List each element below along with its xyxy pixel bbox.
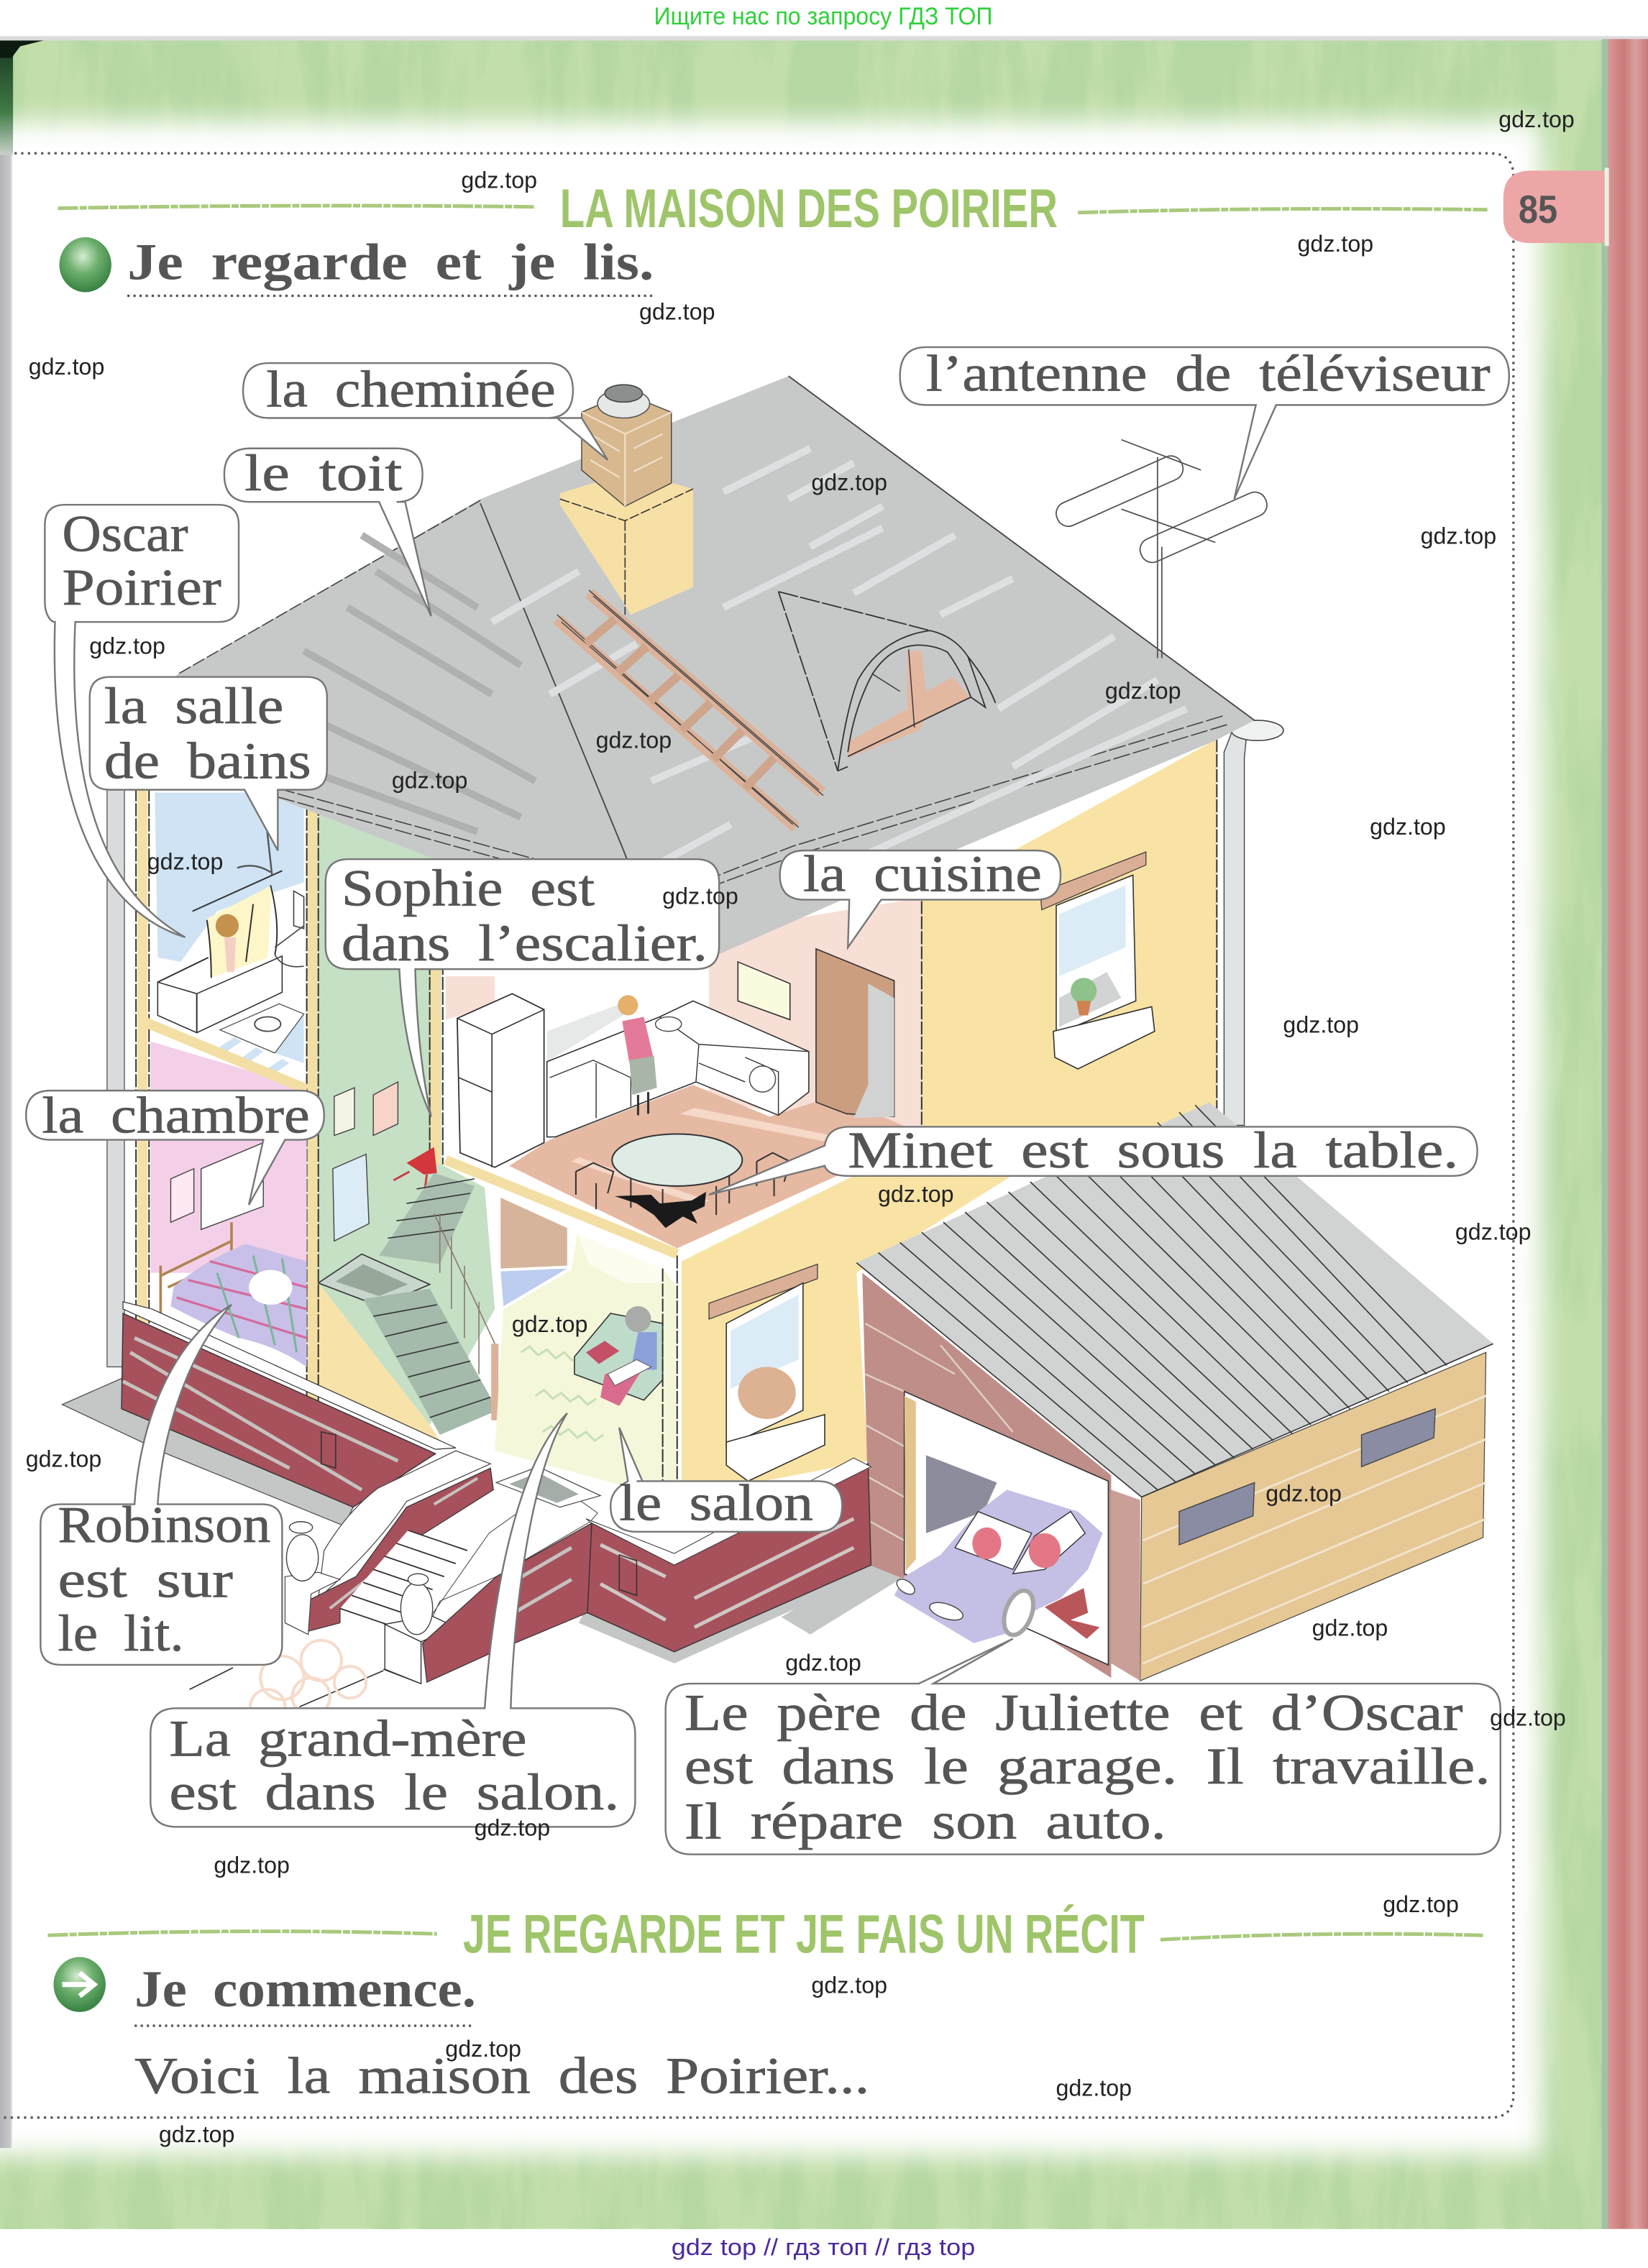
garage windows: [1179, 1482, 1255, 1545]
watermarks: gdz.top: [512, 1311, 587, 1337]
watermarks: gdz.top: [214, 1852, 290, 1878]
watermarks: gdz.top: [445, 2036, 521, 2062]
bubble: la grand-mère est dans le salon: est dans le salon.: [169, 1763, 619, 1821]
heading: la maison des Poirier: [58, 178, 1488, 239]
platforms: [285, 1572, 340, 1635]
page number tab: [1503, 167, 1609, 246]
bubble: Sophie est dans l'escalier: dans l’escalier.: [342, 914, 708, 972]
watermarks: gdz.top: [26, 1446, 101, 1472]
shower curtain: [193, 810, 282, 978]
watermarks: gdz.top: [1498, 106, 1575, 132]
bubble: Oscar Poirier: [45, 505, 239, 937]
bubble: la cuisine: [780, 844, 1061, 947]
heading: la maison des Poirier: LA MAISON DES POIRIER: [560, 178, 1058, 239]
garage: [856, 1102, 1493, 1681]
bubble: la chambre: [26, 1085, 324, 1205]
bubble: Robinson est sur le lit: [40, 1305, 282, 1665]
heading: je regarde et je fais un récit: [47, 1904, 1483, 1965]
bubble: le père dans le garage: est dans le garage. Il travaille.: [685, 1737, 1491, 1795]
window in kitchen wall: [738, 962, 790, 1020]
watermarks: gdz.top: [878, 1181, 954, 1207]
bubble: la cuisine: la cuisine: [803, 844, 1042, 902]
watermarks: gdz.top: [29, 354, 104, 380]
page number tab: 85: [1519, 188, 1557, 231]
ground and pavement: [63, 1379, 905, 1724]
vases: [286, 1522, 433, 1635]
watermarks: gdz.top: [811, 1973, 887, 1998]
watermarks: gdz.top: [392, 768, 467, 794]
watermarks: gdz.top: [461, 167, 537, 193]
toilet and tank: [275, 891, 304, 967]
chimney: [560, 385, 693, 615]
watermarks: gdz.top: [1312, 1615, 1388, 1641]
watermarks: gdz.top: [1490, 1704, 1566, 1730]
grandmother: [586, 1306, 657, 1406]
bubble: le salon: le salon: [619, 1474, 813, 1532]
bubble: la cheminée: [243, 359, 608, 460]
kitchen walls and floor: [430, 897, 926, 1254]
icon: green arrow ball: [53, 1957, 106, 2012]
bubble: le père dans le garage: Le père de Juliette et d’Oscar: [685, 1683, 1462, 1741]
right yellow walls: [682, 720, 1283, 1497]
bathroom: [155, 793, 304, 1078]
text: voici la maison des Poirier: Voici la maison des Poirier...: [134, 2047, 869, 2105]
watermarks: gdz.top: [662, 883, 738, 909]
door opening: [905, 1392, 1108, 1665]
counters: [547, 1001, 809, 1137]
bubble: la chambre: la chambre: [42, 1085, 310, 1144]
dormer window: [779, 592, 995, 771]
stairwell wall: [307, 803, 495, 1446]
watermarks: gdz.top: [1370, 814, 1446, 840]
bubble: la cheminée: la cheminée: [266, 359, 556, 418]
watermarks: gdz.top: [1283, 1012, 1359, 1038]
watermarks: gdz.top: [147, 848, 223, 874]
dotted page frame: [3, 153, 1514, 2118]
section icon: green ball: [60, 237, 111, 292]
bubble: Robinson est sur le lit: Robinson: [58, 1495, 270, 1553]
subheading: je regarde et je lis: Je regarde et je lis.: [127, 232, 654, 290]
upper window: [1040, 852, 1155, 1069]
garage roof: [856, 1102, 1493, 1497]
fridge: [457, 993, 544, 1167]
bubble: l'antenne de téléviseur: l’antenne de téléviseur: [926, 344, 1491, 402]
staircase: [319, 1173, 498, 1435]
bubble: Oscar Poirier: Oscar: [63, 505, 188, 563]
bubble: la salle de bains: [90, 676, 327, 850]
bubble: l'antenne de téléviseur: [900, 344, 1509, 499]
bubble: le père dans le garage: Il répare son auto.: [685, 1791, 1166, 1850]
lower window: [709, 1264, 825, 1481]
left wing wall: [319, 1451, 490, 1598]
table and stools: [576, 1134, 790, 1223]
cat on bed: [249, 1270, 292, 1305]
brick base left: [122, 1302, 456, 1507]
top caption: Ищите нас по запросу ГДЗ ТОП: [654, 3, 992, 30]
bubble: Robinson est sur le lit: le lit.: [58, 1604, 184, 1662]
bubble: Minet est sous la table: Minet est sous la table.: [848, 1121, 1458, 1179]
red book edge on the right: [1602, 39, 1648, 2229]
garage left brick wall: [862, 1273, 1111, 1678]
car: [894, 1489, 1102, 1643]
house illustration: [63, 376, 1493, 1724]
brick base right: [586, 1458, 871, 1652]
corner brick post: [1111, 1489, 1140, 1681]
bubble: Minet est sous la table: [709, 1121, 1478, 1195]
watermarks: gdz.top: [1105, 678, 1181, 704]
bed: [160, 1222, 307, 1367]
watermarks: gdz.top: [1298, 231, 1373, 257]
bubble: le salon: [610, 1428, 842, 1532]
left outer wall and pipe: [107, 745, 149, 1367]
watermarks: gdz.top: [159, 2121, 234, 2147]
bubble: Sophie est dans l'escalier: [326, 859, 719, 1116]
stair wall brick right: [423, 1523, 592, 1682]
subheading: je commence: Je commence.: [134, 1960, 476, 2018]
sofa: [574, 1313, 663, 1400]
black cat under table: [615, 1192, 706, 1228]
watermarks: gdz.top: [811, 469, 887, 495]
bubble: Sophie est dans l'escalier: Sophie est: [342, 859, 595, 917]
bubble: la salle de bains: la salle: [104, 676, 283, 735]
bubble: Oscar Poirier: Poirier: [63, 558, 221, 616]
bubble: le toit: le toit: [244, 444, 402, 502]
watermarks: gdz.top: [639, 299, 715, 325]
bubble: le toit: [224, 444, 431, 616]
watermarks: gdz.top: [89, 633, 165, 658]
watermarks: gdz.top: [1455, 1218, 1531, 1244]
watermarks: gdz.top: [785, 1650, 861, 1676]
legs of father: [1045, 1588, 1099, 1639]
towels on mat: [255, 1017, 280, 1032]
bubble: le père dans le garage: [666, 1639, 1501, 1855]
living room: [495, 1198, 677, 1485]
watermarks: gdz.top: [1421, 523, 1496, 549]
woman at sink: [618, 995, 657, 1115]
watermarks: gdz.top: [475, 1814, 550, 1840]
bubble: la grand-mère est dans le salon: [150, 1413, 635, 1827]
roof highlights: [492, 449, 1186, 868]
bathtub: [157, 956, 282, 1033]
watermarks: gdz.top: [1265, 1481, 1342, 1507]
right parapet: [385, 1484, 598, 1642]
entrance stairs: [285, 1451, 600, 1684]
girl on stairs: [393, 1147, 437, 1198]
watermarks: gdz.top: [1056, 2075, 1132, 2101]
steps: [340, 1530, 467, 1629]
door: [816, 949, 894, 1116]
bottom caption: gdz top // гдз топ // гдз top: [672, 2234, 975, 2260]
bubble: la salle de bains: de bains: [104, 732, 311, 790]
garage right wall: [1140, 1352, 1486, 1681]
bedroom: [146, 1023, 307, 1367]
bubble: Robinson est sur le lit: est sur: [58, 1550, 233, 1608]
heading: je regarde et je fais un récit: JE REGARDE ET JE FAIS UN RÉCIT: [463, 1904, 1145, 1965]
TV antenna: [1053, 440, 1271, 658]
ladder: [557, 590, 823, 827]
left slope darker shading: [217, 535, 536, 832]
picture frames: [333, 1082, 398, 1241]
watermarks: gdz.top: [1383, 1891, 1459, 1917]
watermarks: gdz.top: [596, 727, 672, 753]
main roof: [137, 376, 1255, 956]
drain pipe: [1224, 720, 1283, 1125]
bubble: la grand-mère est dans le salon: La grand-mère: [169, 1709, 526, 1768]
